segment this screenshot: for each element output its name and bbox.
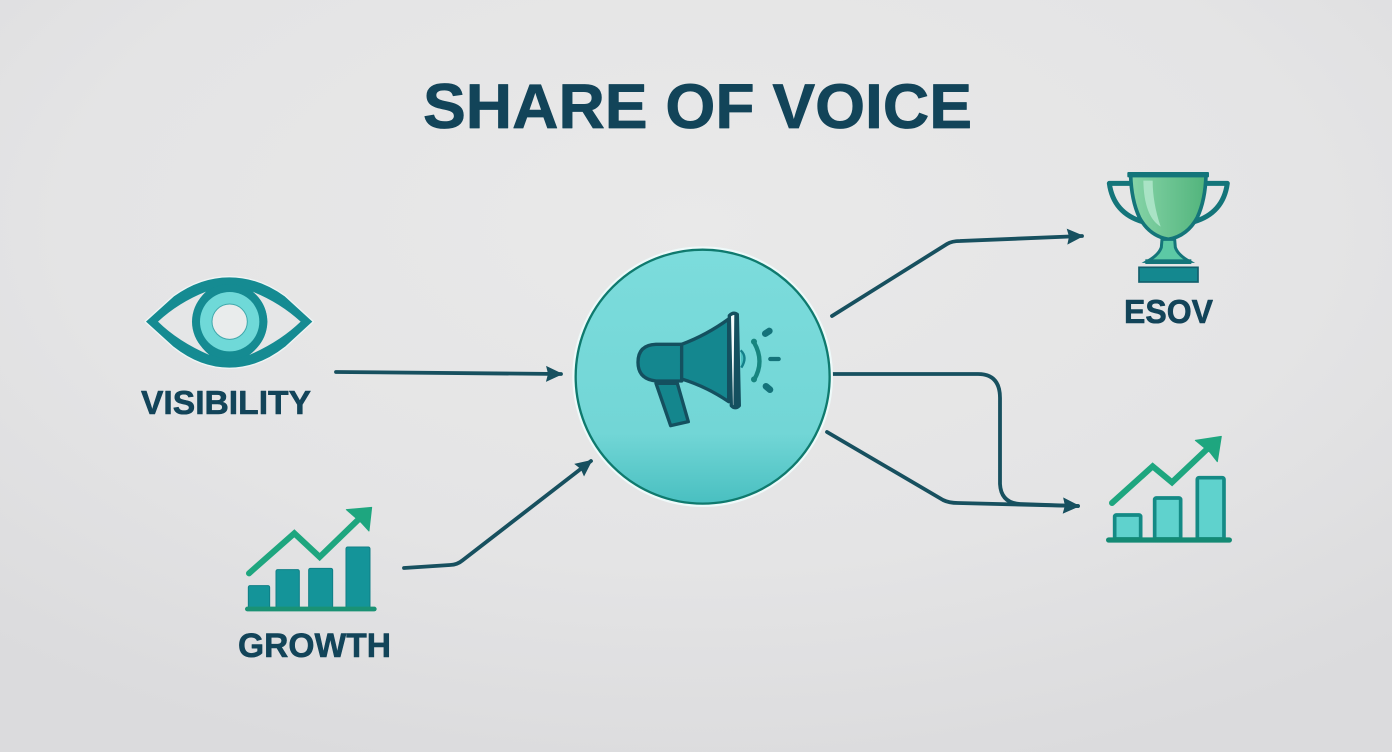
arrow: center looping to results chart [832,374,1078,506]
arrow: center to ESOV [832,236,1082,316]
bars [1115,478,1224,539]
icon: eye [145,277,313,368]
trend arrow [1112,446,1211,503]
icon: trophy [1109,172,1227,282]
stem [1147,239,1189,261]
cup [1131,175,1206,239]
icon: growth chart [245,507,377,611]
center circle with megaphone [574,248,831,505]
baseline [245,607,377,611]
disc [574,248,831,505]
handles [1109,183,1143,222]
label: ESOV: ESOV [1124,293,1213,330]
icon: megaphone [638,313,744,426]
sound waves [751,331,779,390]
arrow: visibility to center [336,372,561,374]
trend arrow [249,518,360,573]
rim [1127,172,1209,177]
title: SHARE OF VOICE [423,72,972,142]
plinth [1145,259,1191,264]
label: growth: GROWTH [238,627,391,665]
arrow: growth to center [404,461,591,568]
arrow: center to results chart [827,432,1078,506]
baseline [1106,537,1232,543]
label: visibility: VISIBILITY [141,384,311,421]
icon: results chart [1106,436,1232,543]
bars [248,547,370,608]
